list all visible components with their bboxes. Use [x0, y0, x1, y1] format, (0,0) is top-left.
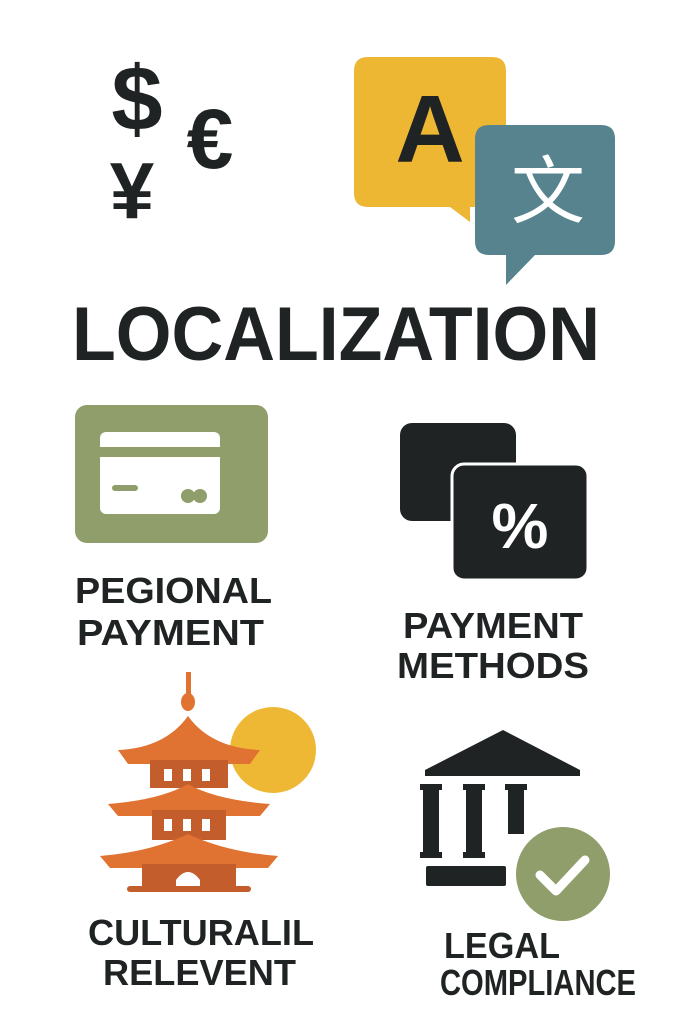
icon: currency symbols: $: [111, 48, 163, 150]
panel: regional payment: [75, 405, 272, 653]
icon: translation bubbles: [354, 57, 615, 285]
panel: culturally relevant: [88, 672, 316, 993]
label: legal compliance: [440, 925, 636, 1003]
panel: payment methods: [397, 423, 589, 686]
icon: currency symbols: ¥: [110, 146, 155, 235]
title: LOCALIZATION: [72, 292, 600, 377]
icon: credit card: [75, 405, 268, 543]
label: culturally relevant: [88, 912, 314, 993]
icon: currency symbols: €: [187, 92, 233, 186]
label: payment methods: PAYMENT: [403, 605, 583, 646]
label: culturally relevant: CULTURALIL: [88, 912, 314, 953]
label: regional payment: PAYMENT: [77, 612, 264, 653]
label: payment methods: METHODS: [397, 645, 589, 686]
panel: legal compliance: [420, 730, 636, 1003]
icon: pagoda: [100, 672, 278, 892]
icon: courthouse: [420, 730, 580, 886]
icon: currency symbols: [110, 48, 233, 235]
icon: translation bubbles: 文: [511, 150, 585, 233]
label: regional payment: [75, 570, 272, 653]
label: legal compliance: LEGAL: [444, 925, 560, 966]
label: culturally relevant: RELEVENT: [103, 952, 296, 993]
icon: check badge: [514, 825, 612, 923]
label: legal compliance: COMPLIANCE: [440, 962, 636, 1003]
label: regional payment: PEGIONAL: [75, 570, 272, 611]
label: payment methods: [397, 605, 589, 686]
icon: discount cards: [400, 423, 588, 580]
icon: discount cards: %: [492, 490, 548, 562]
icon: translation bubbles: A: [395, 76, 465, 183]
icon: sun: [230, 707, 316, 793]
